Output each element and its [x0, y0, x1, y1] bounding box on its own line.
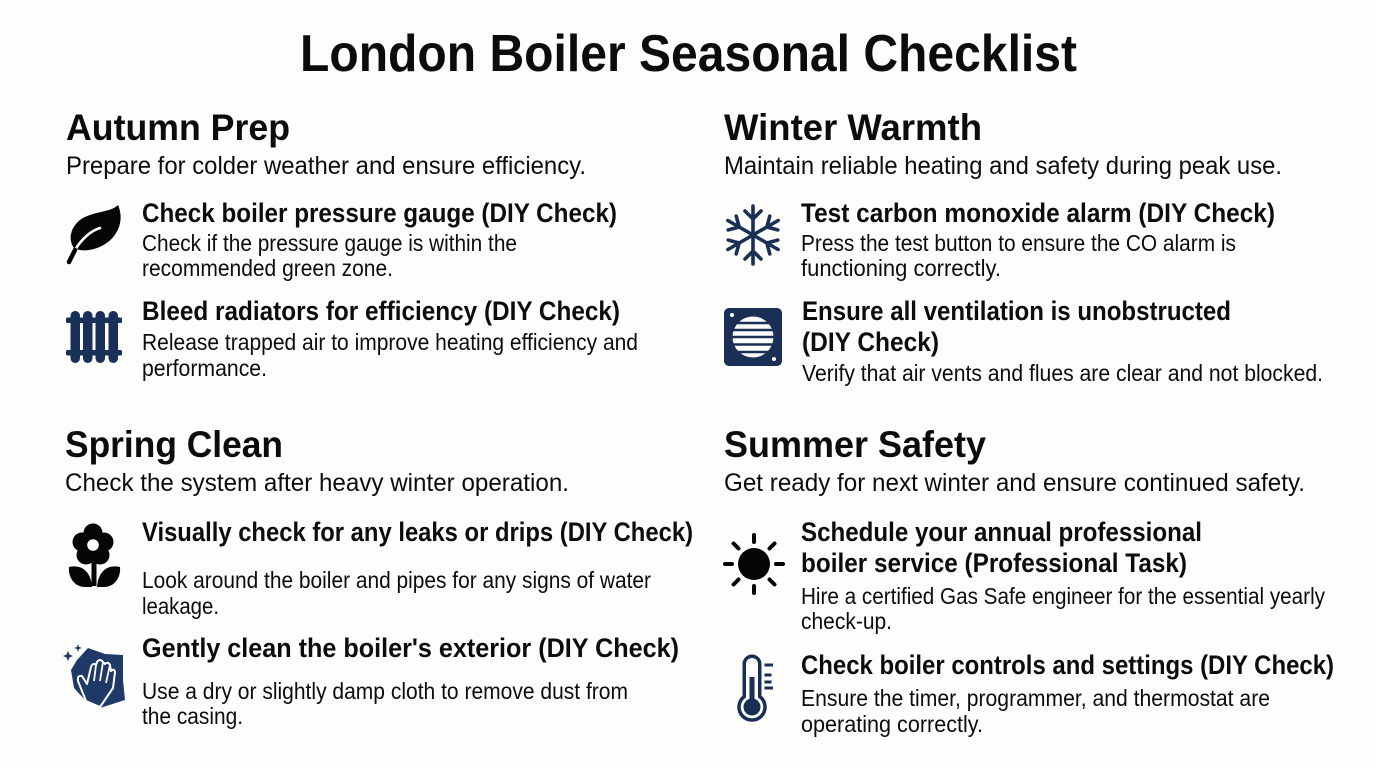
checklist item: bleed radiators: Bleed radiators for efficiency (DIY Check) — [142, 296, 620, 326]
checklist item: annual service: Schedule your annual professional — [801, 517, 1202, 547]
checklist item: leaks: Look around the boiler and pipes for any signs of water — [142, 567, 651, 593]
checklist item: controls: Ensure the timer, programmer, and thermostat are — [801, 685, 1270, 711]
checklist item: annual service: check-up. — [801, 608, 892, 634]
checklist item: annual service — [801, 517, 1325, 634]
checklist item: ventilation: (DIY Check) — [802, 327, 939, 357]
checklist item: clean exterior: Gently clean the boiler's exterior (DIY Check) — [142, 633, 679, 663]
heading: Autumn Prep: Autumn Prep — [66, 107, 290, 148]
checklist item: CO alarm: Test carbon monoxide alarm (DIY Check) — [801, 198, 1275, 228]
checklist item: ventilation: Ensure all ventilation is unobstructed — [802, 296, 1231, 326]
panel: Autumn Prep — [66, 107, 638, 381]
checklist item: annual service: boiler service (Professional Task) — [801, 548, 1187, 578]
checklist item: pressure gauge: Check if the pressure gauge is within the — [142, 230, 517, 256]
checklist item: bleed radiators: performance. — [142, 355, 267, 381]
subtitle: Winter Warmth: Maintain reliable heating and safety during peak use. — [724, 152, 1282, 180]
checklist item: bleed radiators — [142, 296, 638, 381]
icon: flower — [69, 524, 120, 587]
checklist item: clean exterior — [142, 633, 679, 729]
checklist item: controls — [801, 650, 1334, 737]
checklist item: CO alarm — [801, 198, 1275, 281]
icon: snowflake — [724, 206, 782, 264]
checklist item: leaks — [142, 517, 693, 619]
checklist item: controls: operating correctly. — [801, 711, 983, 737]
checklist item: pressure gauge: recommended green zone. — [142, 255, 393, 281]
icon: vent — [724, 308, 782, 366]
title: London Boiler Seasonal Checklist — [300, 25, 1077, 83]
checklist item: bleed radiators: Release trapped air to improve heating efficiency and — [142, 329, 638, 355]
icon: leaf — [69, 205, 121, 262]
icon: sun — [725, 535, 783, 593]
panel: Winter Warmth — [724, 107, 1323, 386]
heading: Spring Clean: Spring Clean — [65, 424, 283, 465]
heading: Summer Safety: Summer Safety — [724, 424, 986, 465]
heading: Winter Warmth: Winter Warmth — [724, 107, 982, 148]
panel: Spring Clean — [63, 424, 693, 729]
icon: radiator — [66, 311, 122, 363]
checklist item: clean exterior: the casing. — [142, 703, 243, 729]
checklist item: pressure gauge: Check boiler pressure gauge (DIY Check) — [142, 198, 617, 228]
subtitle: Spring Clean: Check the system after heavy winter operation. — [65, 469, 569, 497]
checklist item: CO alarm: Press the test button to ensure the CO alarm is — [801, 230, 1236, 256]
subtitle: Autumn Prep: Prepare for colder weather and ensure efficiency. — [66, 152, 586, 180]
icon: cleaning cloth and hand — [63, 644, 125, 708]
checklist item: controls: Check boiler controls and settings (DIY Check) — [801, 650, 1334, 680]
checklist item: ventilation — [802, 296, 1323, 386]
checklist item: clean exterior: Use a dry or slightly damp cloth to remove dust from — [142, 678, 628, 704]
subtitle: Summer Safety: Get ready for next winter and ensure continued safety. — [724, 469, 1305, 497]
panel: Summer Safety — [724, 424, 1334, 737]
checklist item: leaks: Visually check for any leaks or drips (DIY Check) — [142, 517, 693, 547]
checklist item: leaks: leakage. — [142, 593, 219, 619]
checklist item: pressure gauge — [142, 198, 617, 281]
icon: thermometer — [739, 656, 773, 720]
checklist item: CO alarm: functioning correctly. — [801, 255, 1001, 281]
checklist item: ventilation: Verify that air vents and flues are clear and not blocked. — [802, 360, 1323, 386]
